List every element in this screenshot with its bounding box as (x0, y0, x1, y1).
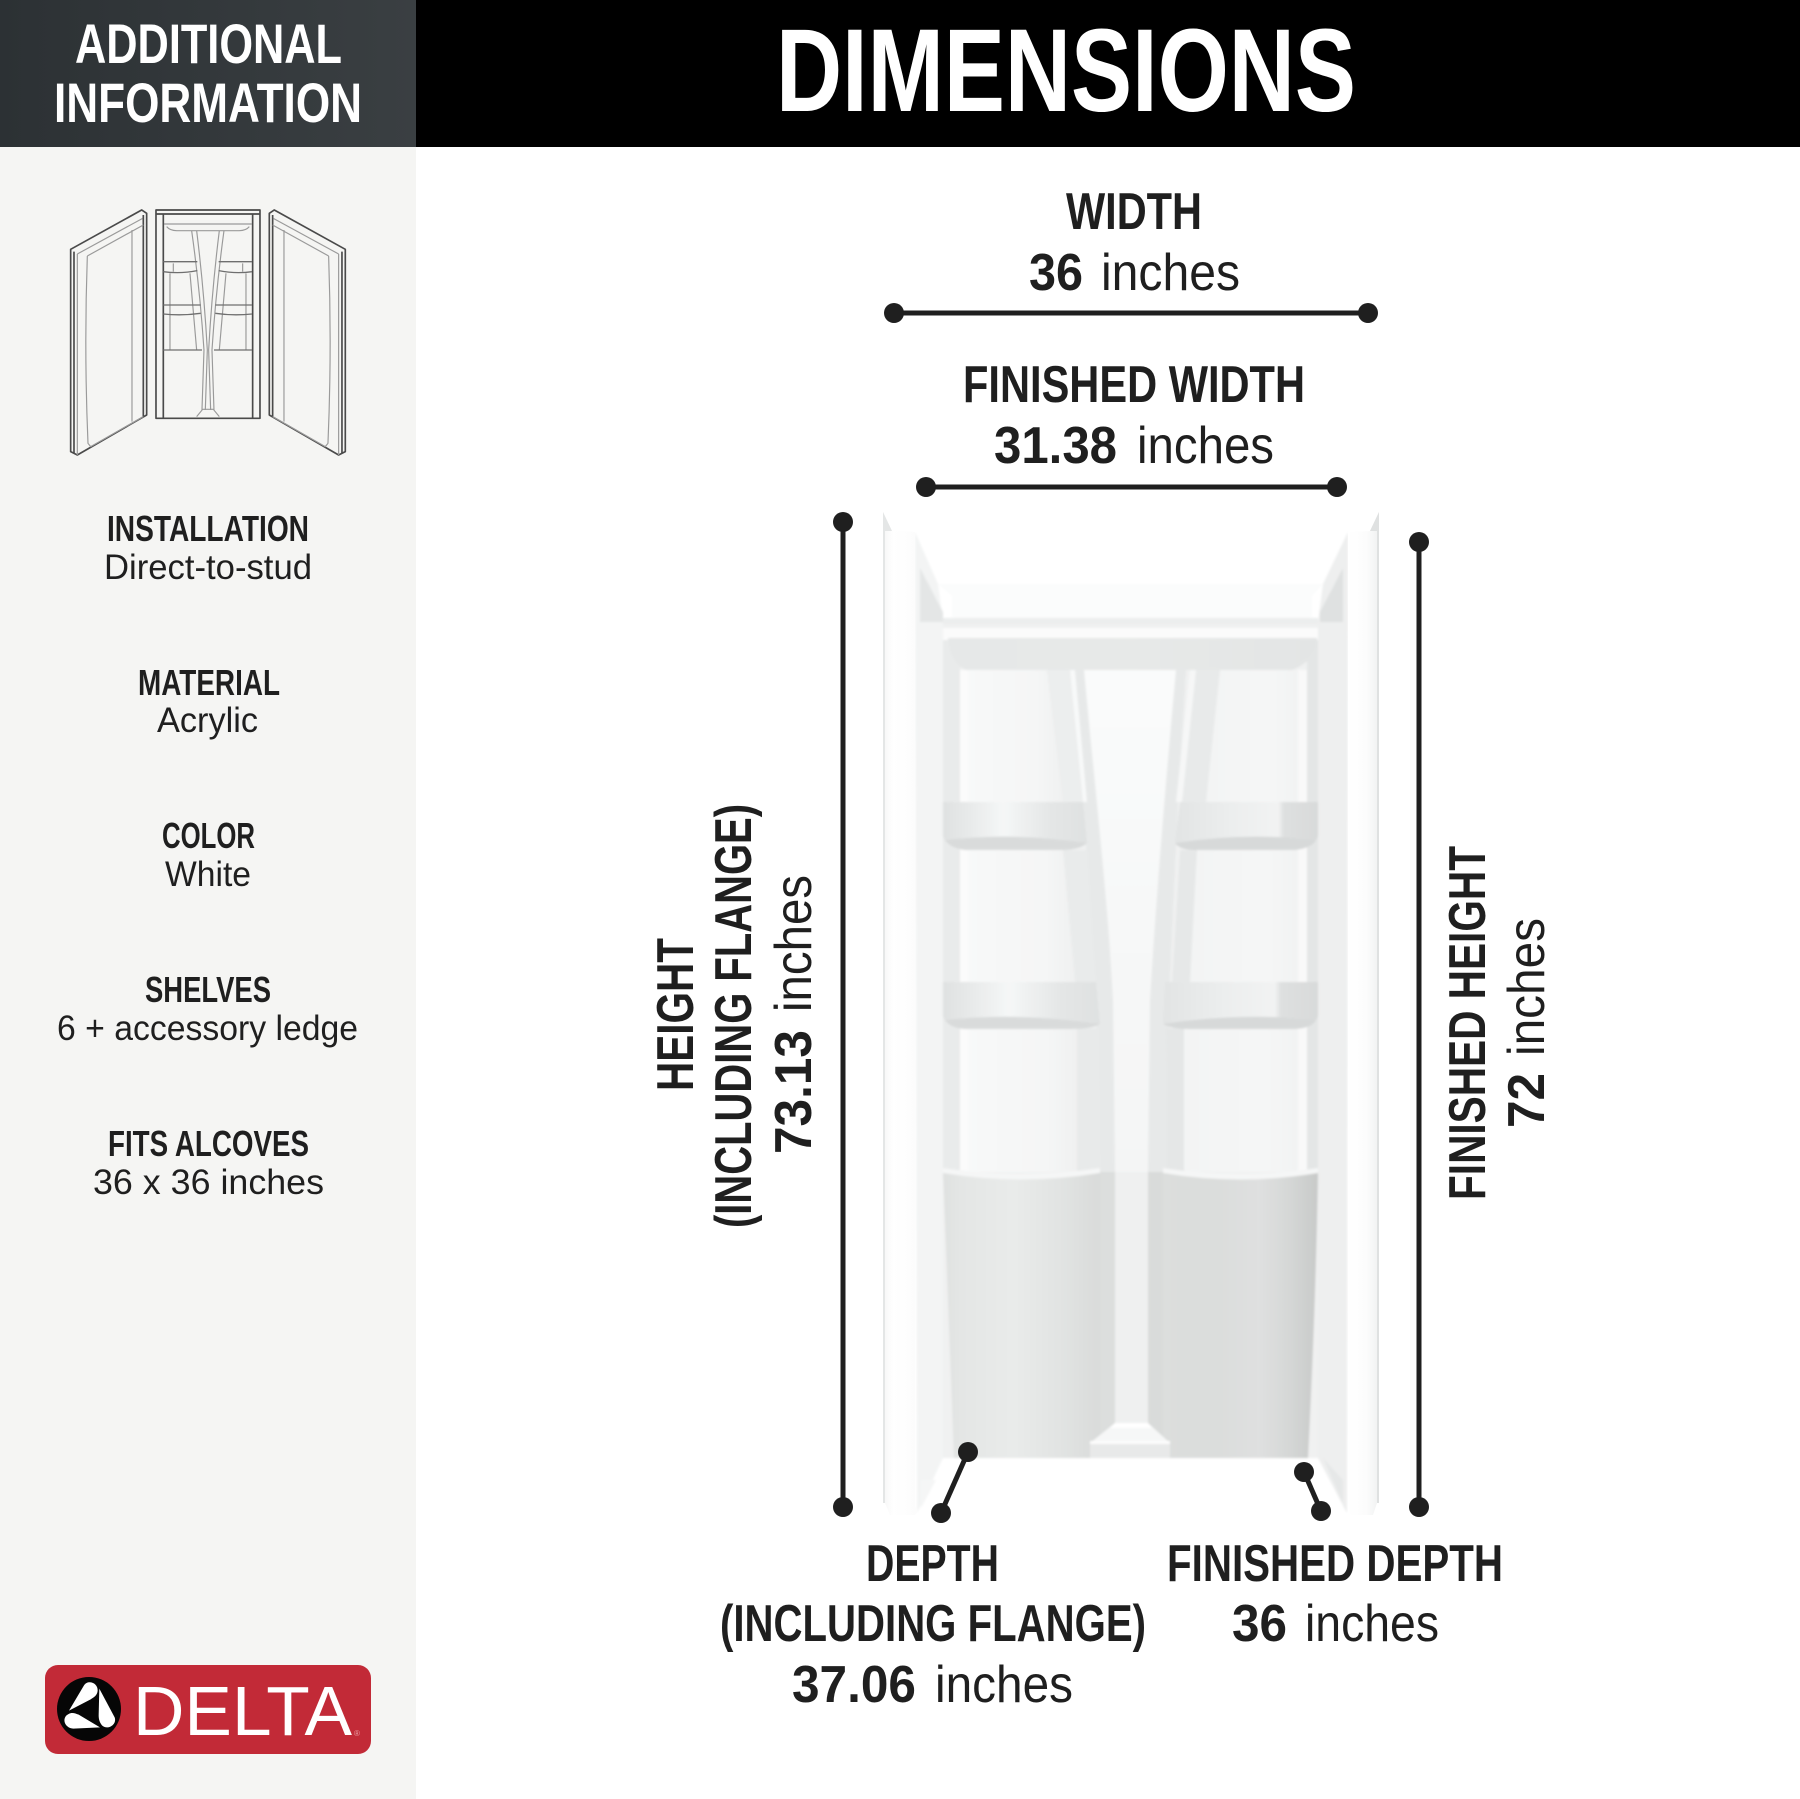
icon: line drawing of three wall panels (71, 210, 345, 455)
spec: material: MATERIAL (138, 662, 280, 703)
dimension: width: 36 (1029, 244, 1083, 302)
dimension: depth including flange: inches (935, 1656, 1073, 1714)
sidebar heading: INFORMATION (54, 71, 362, 134)
dimension: finished width: inches (1137, 417, 1274, 475)
dimension: width: WIDTH (1066, 183, 1202, 241)
spec: material: Acrylic (157, 701, 258, 740)
spec: color (162, 815, 255, 894)
dimension: height including flange: (INCLUDING FLANGE) (705, 804, 763, 1228)
dimension: width: inches (1101, 244, 1240, 302)
dimension: finished depth: FINISHED DEPTH (1167, 1535, 1503, 1593)
dimension: width (884, 183, 1378, 323)
side walls and top cap (915, 532, 1348, 1513)
dimension: finished height (1409, 532, 1556, 1517)
spec: installation: Direct-to-stud (104, 548, 312, 587)
dimension: finished height: inches (1498, 918, 1556, 1056)
spec: fits alcoves (93, 1123, 324, 1202)
back wall (943, 618, 1318, 1458)
title banner (416, 0, 1800, 147)
spec: installation: INSTALLATION (107, 508, 309, 549)
logo: Delta: ® (354, 1729, 360, 1738)
spec: installation (104, 508, 312, 587)
shower wall product image (883, 512, 1379, 1515)
dimension: depth including flange: (INCLUDING FLANGE) (720, 1595, 1146, 1653)
dimension: height including flange: 73.13 (765, 1030, 823, 1154)
central spine (1084, 670, 1176, 1423)
channels beside spine (1047, 670, 1186, 1458)
sidebar heading (0, 0, 416, 147)
dimension: finished width (916, 356, 1347, 497)
logo: Delta (45, 1665, 371, 1754)
dimension: depth including flange: DEPTH (866, 1535, 999, 1593)
accessory ledge (948, 638, 1317, 670)
edge columns (943, 640, 960, 1180)
dimension: height including flange (647, 512, 853, 1517)
sidebar heading: ADDITIONAL (75, 12, 342, 75)
lower basin right (1163, 1172, 1318, 1458)
dimension: finished depth: inches (1305, 1595, 1439, 1653)
dimension: depth including flange: 37.06 (792, 1656, 916, 1714)
dimension: height including flange: HEIGHT (647, 938, 705, 1091)
spec: shelves: 6 + accessory ledge (57, 1009, 358, 1048)
spec: color: White (165, 855, 251, 894)
left flange (883, 512, 917, 1515)
shelves right (1175, 802, 1318, 843)
spec: material (138, 662, 280, 740)
dimension: finished depth (1167, 1462, 1503, 1653)
spec: shelves (57, 969, 358, 1048)
dimension: finished depth: 36 (1232, 1595, 1287, 1653)
dimension: depth including flange (720, 1442, 1146, 1714)
spec: color: COLOR (162, 815, 255, 856)
spec: shelves: SHELVES (145, 969, 271, 1010)
sidebar panel (0, 0, 416, 1799)
lower spine and base trapezoid (1115, 1172, 1148, 1423)
dimension: finished width: FINISHED WIDTH (963, 356, 1305, 414)
spec: fits alcoves: 36 x 36 inches (93, 1163, 324, 1202)
dimension: finished height: FINISHED HEIGHT (1439, 846, 1497, 1200)
dimension: height including flange: inches (765, 875, 823, 1012)
title banner: DIMENSIONS (776, 5, 1356, 137)
dimension: finished width: 31.38 (994, 417, 1117, 475)
dimension: finished height: 72 (1498, 1073, 1556, 1128)
logo: Delta: DELTA (133, 1672, 352, 1750)
spec: fits alcoves: FITS ALCOVES (108, 1123, 309, 1164)
right flange (1348, 512, 1379, 1515)
lower basin left (943, 1172, 1100, 1458)
shelves left (943, 802, 1087, 843)
upper storage panels (968, 670, 1063, 802)
